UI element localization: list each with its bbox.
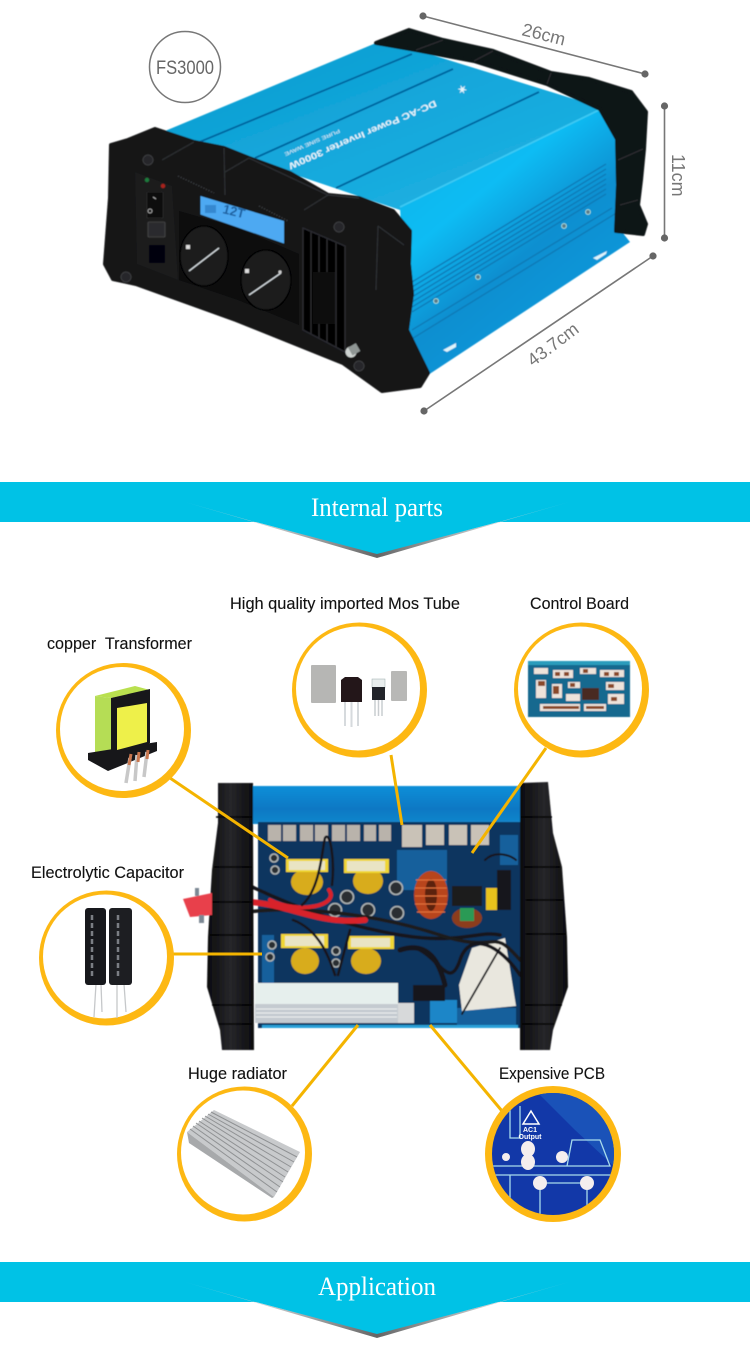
internal board photo [183,782,568,1050]
LED indicators [145,178,165,188]
icon: heat sink [187,1110,300,1198]
USB port [148,222,165,237]
icon: PCB close-up [492,1093,614,1215]
ring [485,1086,621,1222]
banner: Internal parts: Internal parts [311,493,443,522]
leader line: PCB [430,1025,502,1111]
label: expensive PCB: Expensive PCB [499,1065,605,1083]
dimension: height 11cm: 11cm [668,154,688,197]
flange notches [443,251,607,352]
label: huge radiator: Huge radiator [188,1065,288,1083]
wires [248,837,520,1014]
copper inductor [414,871,448,919]
remote port [149,245,165,263]
circuit board [258,822,520,1028]
bumper ridge lines [162,142,404,290]
leader line: capacitor [172,952,262,956]
dimension: length 43.7cm [420,252,657,415]
top edge highlight [400,108,603,207]
icon: mos tubes [311,665,407,727]
aluminium radiator [255,983,414,1023]
label: control board: Control Board [530,595,629,613]
callout: huge radiator [177,1065,312,1222]
ring [177,1086,312,1222]
icon: PCB close-up: Output [519,1134,542,1141]
white film capacitors [459,938,516,1011]
socket right [241,250,291,310]
label: copper transformer: copper Transformer [47,635,193,653]
transformers [281,859,394,974]
top print text [282,81,469,171]
side face of casing [400,108,630,375]
vent grid [303,228,345,352]
ring [292,622,427,758]
icon: control board [528,661,630,717]
mosfet heatsink row [268,825,489,847]
on/off switch [147,192,163,218]
inverter product photo [105,30,646,391]
icon: capacitors [85,908,132,1018]
leader line: mos tube [391,755,402,825]
leader line: radiator [292,1025,358,1106]
top print text: DC-AC Power Inverter 3000W [287,98,438,171]
right bumper [520,782,568,1050]
model badge FS3000 [150,32,220,102]
LCD display: 12T [221,201,247,221]
label: mos tube: High quality imported Mos Tube [230,595,460,613]
label: electrolytic capacitor: Electrolytic Capacitor [31,864,185,882]
filter choke [452,870,511,928]
leader line: control board [472,748,546,853]
blue board patches [262,835,518,1026]
dimension: height 11cm [661,102,688,242]
front panel [105,129,428,391]
top print text: PURE SINE WAVE [282,127,341,157]
capacitors [266,854,404,967]
side screws [434,210,590,303]
leader line: transformer [170,778,288,858]
vents strip [178,176,288,221]
top grooves [197,54,539,188]
LCD display [200,196,284,244]
callout: control board [514,595,649,758]
small heat sink [413,985,445,1001]
bottom edge [262,1025,518,1028]
blue casing top [250,786,522,824]
socket left [180,226,228,286]
banner: Application: Application [318,1272,436,1301]
dimension: length 43.7cm: 43.7cm [523,319,583,370]
banner: Internal parts [0,482,750,558]
bumper segment lines [210,817,566,1024]
rear bumper highlights [416,40,643,205]
dimension: width 26cm: 26cm [520,19,568,50]
ring [56,663,191,798]
icon: PCB close-up: AC1 [523,1127,537,1134]
side ridges [410,164,618,340]
left bumper [207,783,254,1050]
corner screws [121,155,364,371]
socket panel [179,211,299,325]
model badge FS3000: FS3000 [156,57,214,79]
terminal bolt [346,343,360,358]
callout: mos tube [230,595,460,758]
ring [514,622,649,758]
ring [39,890,174,1026]
red battery terminal [183,888,212,923]
top face of casing [165,43,603,210]
dimension: width 26cm [419,12,649,78]
rear bumper [376,30,646,234]
callout: copper transformer [47,635,193,798]
banner: Application [0,1262,750,1338]
callout: expensive PCB [485,1065,621,1222]
front panel inner recess [135,172,178,280]
callout: electrolytic capacitor [31,864,185,1026]
top print text: ✶ [455,81,469,96]
icon: transformer [88,686,157,783]
